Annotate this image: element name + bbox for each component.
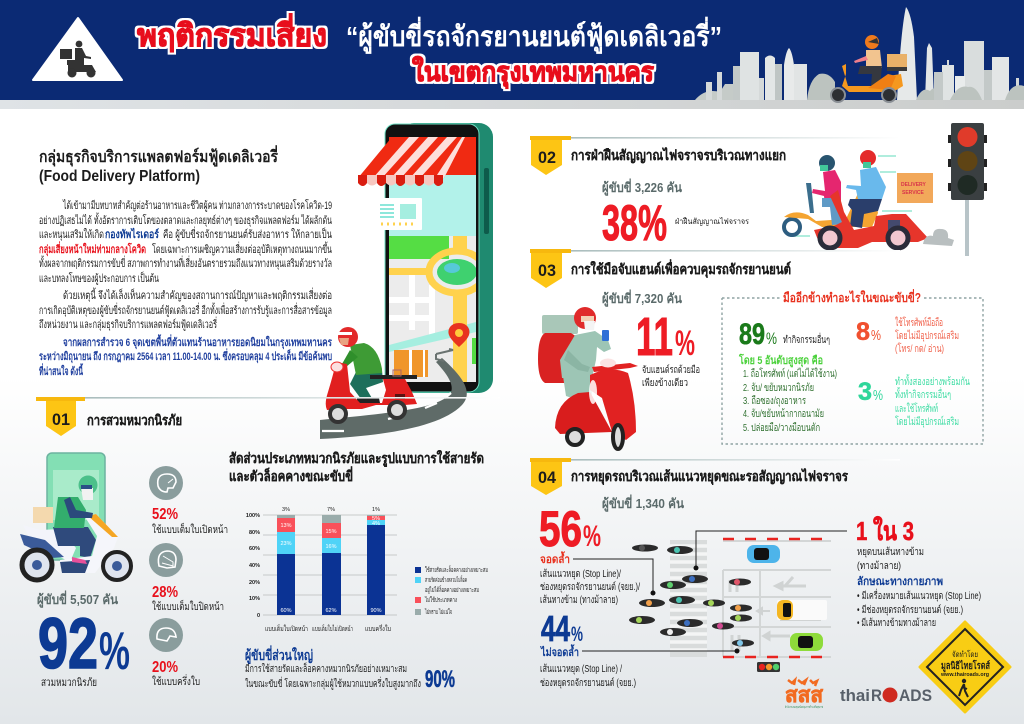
label 20 percent: ใช้แบบครึ่งใบ	[152, 674, 200, 688]
section divider and badge 01: 01	[52, 410, 70, 429]
chart title: สัดส่วนประเภทหมวกนิรภัยและรูปแบบการใช้สายรัด	[229, 449, 484, 467]
paragraph three: survey note: จากผลการสำรวจ 6 จุดเขตพื้นที่ตัวแทนร้านอาหารยอดนิยมในกรุงเทพมหานคร	[63, 334, 332, 350]
statistic 8 percent: 8	[856, 318, 870, 346]
paragraph one: อย่างปฏิเสธไม่ได้ ทั้งอัตราการเติบโตของตลาดและกลยุทธ์ต่างๆ ของธุรกิจแพลตฟอร์ม ได้ผลักดัน	[39, 212, 332, 227]
statistic 28 percent: 28%	[152, 584, 178, 601]
section divider and badge 03: 03	[538, 261, 556, 280]
paragraph one: และหนุนเสริมให้เกิด	[39, 228, 104, 241]
stacked bar chart: 20%	[249, 580, 260, 586]
bar: half helmet	[367, 515, 385, 615]
winding road	[320, 349, 467, 439]
logo: thaiRoads: ADS	[899, 686, 932, 705]
icon: open face full helmet	[149, 466, 183, 500]
paragraph one	[39, 198, 332, 285]
label doing both: และใช้โทรศัพท์	[895, 402, 938, 415]
statistic 11 percent: 11	[636, 307, 673, 367]
illustration: city skyline	[695, 7, 1024, 100]
section 03: one-handed riding	[530, 249, 983, 449]
stacked bar chart: 62%	[325, 608, 337, 614]
rider count 7,320: ผู้ขับขี่ 7,320 คัน	[602, 289, 682, 307]
statistic 11 percent: %	[675, 324, 695, 363]
top five list: 3. ถือซอง/ถุงอาหาร	[743, 394, 806, 407]
paragraph one: และบทลงโทษของผู้ประกอบการ เป็นต้น	[39, 271, 159, 285]
statistic 56 percent: 56	[539, 501, 582, 557]
logo: thaiRoads: thai	[840, 686, 870, 705]
statistic 56 percent: %	[583, 520, 601, 553]
rider count 5,507: ผู้ขับขี่ 5,507 คัน	[37, 590, 118, 608]
illustration: rider holding phone on red scooter	[538, 307, 638, 449]
illustration: two scooters speeding	[784, 150, 954, 248]
label stopping on crosswalk: (ทางม้าลาย)	[857, 560, 901, 572]
sign: Thai Roads Foundation: จัดทำโดย	[952, 649, 978, 659]
label not over the line: ไม่จอดล้ำ	[539, 644, 579, 659]
leader line to over the line label	[573, 559, 656, 596]
description over the line: เส้นทางข้าม (ทางม้าลาย)	[540, 594, 618, 606]
top five list: 1. ถือโทรศัพท์ (แต่ไม่ได้ใช้งาน)	[743, 367, 837, 380]
sign: Thai Roads Foundation: www.thairoads.org	[940, 672, 989, 678]
label stopping on crosswalk	[857, 546, 924, 572]
logo: thaiRoads	[840, 686, 932, 705]
label one-handed: จับแฮนด์รถด้วยมือ	[642, 364, 700, 376]
rider count 3,226: ผู้ขับขี่ 3,226 คัน	[602, 178, 682, 196]
stacked bar chart: 4%	[372, 521, 380, 527]
label over the line: จอดล้ำ	[540, 551, 570, 566]
paragraph two: ด้วยเหตุนี้ จึงได้เล็งเห็นความสำคัญของสถานการณ์ปัญหาและพฤติกรรมเสี่ยงต่อ	[63, 287, 332, 302]
stacked bar chart: 40%	[249, 563, 260, 569]
statistic 20 percent: 20%	[152, 659, 178, 676]
top five list	[743, 367, 837, 434]
label one-handed: เพียงข้างเดียว	[642, 377, 688, 389]
label doing both	[895, 374, 970, 428]
icon: warning triangle with delivery rider	[33, 18, 122, 80]
chart title	[229, 449, 484, 484]
illustration: rider on red scooter	[326, 327, 417, 422]
chart title: และตัวล็อคคางขณะขับขี่	[229, 466, 353, 484]
motorcycles waiting	[629, 544, 754, 646]
description not over the line	[540, 663, 636, 689]
label doing both: โดยไม่มีอุปกรณ์เสริม	[895, 415, 959, 428]
icon: traffic signal	[757, 662, 780, 672]
bar: full face open visor	[277, 515, 295, 615]
stacked bar chart: 7%	[327, 507, 335, 513]
physical characteristics list: • มีเครื่องหมายเส้นแนวหยุด (Stop Line)	[857, 588, 981, 602]
paragraph one: ได้เข้ามามีบทบาทสำคัญต่อร้านอาหารและชีวิตผู้คน ท่ามกลางการระบาดของโรคโควิด-19	[62, 198, 332, 212]
statistic 89 percent: %	[766, 329, 777, 348]
label one-handed	[642, 364, 700, 389]
panel heading: มืออีกข้างทำอะไรในขณะขับขี่?	[783, 289, 921, 305]
statistic 92 percent: %	[99, 622, 130, 681]
stacked bar chart: 10%	[249, 596, 260, 602]
illustration: two scooters speeding: DELIVERY	[901, 182, 926, 188]
stacked bar chart: 1%	[372, 507, 380, 513]
section divider and badge 02	[530, 136, 900, 175]
paragraph two: ถึงหน่วยงาน และกลุ่มธุรกิจบริการแพลตฟอร์มฟู้ดเดลิเวอรี่	[39, 316, 217, 331]
stacked bar chart: 60%	[280, 608, 292, 614]
callout: most riders: ผู้ขับขี่ส่วนใหญ่	[245, 645, 313, 664]
statistic 92 percent: 92	[38, 605, 98, 684]
illustration: two scooters speeding: SERVICE	[902, 190, 925, 196]
description over the line: ช่องหยุดรถจักรยานยนต์ (จยย.)/	[540, 581, 640, 593]
stacked bar chart: 80%	[249, 530, 260, 536]
statistic 3 percent: 3	[858, 378, 872, 406]
statistic 89 percent: 89	[739, 318, 765, 351]
logo: ThaiHealth: สำนักงานกองทุนสนับสนุนการสร้างเสริมสุขภาพ	[785, 705, 823, 710]
section divider and badge 03	[530, 249, 900, 288]
bar: full face closed visor	[322, 515, 341, 615]
paragraph three: survey note	[39, 334, 332, 378]
statistic 38 percent: 38%	[602, 195, 667, 251]
stacked bar chart: แบบเต็มใบไม่เปิดหน้า	[312, 624, 353, 633]
chart panel: helmet types and chin strap use	[229, 449, 488, 693]
statistic 3 percent: %	[873, 387, 883, 404]
paragraph three: survey note: ระหว่างมิถุนายน ถึง กรกฎาคม 2564 เวลา 11.00-14.00 น. ซึ่งครอบคลุม 4 ประเด็น มีข้อค้นพบ	[39, 348, 332, 364]
section 04: stopping at stop line	[530, 458, 1010, 712]
stacked bar chart: 0	[257, 613, 260, 619]
label phone use without accessory: ใช้โทรศัพท์มือถือ	[895, 316, 943, 329]
heading physical characteristics: ลักษณะทางกายภาพ	[857, 575, 943, 588]
chart legend: ไม่ใช้ประเภทคาง	[424, 596, 457, 604]
label doing both: ทำทั้งสองอย่างพร้อมกัน	[895, 374, 970, 388]
heading: food delivery platform: (Food Delivery Platform)	[39, 168, 200, 185]
heading 04: การหยุดรถบริเวณเส้นแนวหยุดขณะรอสัญญาณไฟจราจร	[571, 467, 848, 485]
logo: thaiRoads: R	[871, 686, 882, 705]
header banner	[0, 0, 1024, 109]
paragraph one: คือ ผู้ขับขี่รถจักรยานยนต์รับส่งอาหาร ให้กลายเป็น	[163, 226, 332, 241]
statistic 3 percent	[858, 378, 883, 406]
leader line to not over the line label	[582, 648, 740, 654]
physical characteristics list: • มีเส้นทางข้ามทางม้าลาย	[857, 617, 936, 629]
paragraph three: survey note: ที่น่าสนใจ ดังนี้	[39, 363, 83, 378]
section divider and badge 04: 04	[538, 468, 557, 487]
top five list heading: โดย 5 อันดับสูงสุด คือ	[738, 353, 823, 368]
diagram: intersection with motorcycles	[629, 539, 831, 672]
stacked bar chart: 60%	[249, 546, 260, 552]
statistic 44 percent: %	[571, 623, 583, 646]
section divider and badge 02: 02	[538, 148, 556, 167]
stacked bar chart: 13%	[280, 523, 292, 529]
paragraph one: กองทัพไรเดอร์	[105, 227, 159, 241]
stacked bar chart: 3%	[282, 507, 290, 513]
statistic 1 in 3: 1 ใน 3	[856, 516, 914, 546]
section divider and badge 01	[36, 397, 500, 436]
illustration: phone with storefront, map and rider	[320, 123, 493, 439]
sign: Thai Roads Foundation	[920, 622, 1010, 712]
chart legend	[415, 565, 488, 616]
chart legend: อยู่ไม่ได้ล็อคคางอย่างเหมาะสม	[425, 585, 479, 594]
car: blue	[747, 545, 780, 563]
description not over the line: เส้นแนวหยุด (Stop Line) /	[540, 663, 622, 675]
icon: closed full face helmet	[149, 543, 183, 577]
statistic 8 percent	[856, 318, 881, 346]
description not over the line: ช่องหยุดรถจักรยานยนต์ (จยย.)	[540, 677, 636, 689]
heading 02: การฝ่าฝืนสัญญาณไฟจราจรบริเวณทางแยก	[571, 146, 786, 164]
title: in Bangkok: ในเขตกรุงเทพมหานคร	[412, 56, 654, 89]
title: food delivery riders: “ผู้ขับขี่รถจักรยานยนต์ฟู้ดเดลิเวอรี่”	[346, 16, 722, 54]
chart legend: ใช้สายรัดและล็อคคางอย่างเหมาะสม	[425, 565, 488, 574]
stacked bar chart: 5%	[372, 516, 380, 522]
label red light running: ฝ่าฝืนสัญญาณไฟจราจร	[675, 217, 750, 226]
top five list: 2. จับ/ ขยับหมวกนิรภัย	[743, 382, 814, 394]
panel: what the other hand is doing	[722, 289, 983, 444]
icon: location pin	[448, 323, 470, 347]
paragraph one: ทั้งผลจากพฤติกรรมการขับขี่ สภาพการทำงานที่เสี่ยงอันตรายรวมถึงแนวทางหนุนเสริมด้วยรางวัล	[39, 255, 332, 270]
sign: Thai Roads Foundation: มูลนิธิไทยโรดส์	[941, 659, 991, 673]
callout text: ในขณะขับขี่ โดยเฉพาะกลุ่มผู้ใช้หมวกแบบครึ่งใบสูงมากถึง	[245, 676, 421, 690]
heading 03: การใช้มือจับแฮนด์เพื่อควบคุมรถจักรยานยนต์	[571, 259, 791, 278]
label 52 percent: ใช้แบบเต็มใบเปิดหน้า	[152, 522, 228, 536]
title: risk behaviour: พฤติกรรมเสี่ยง	[137, 13, 327, 53]
rider count 1,340: ผู้ขับขี่ 1,340 คัน	[602, 494, 684, 512]
stacked bar chart: แบบเต็มใบเปิดหน้า	[265, 624, 308, 633]
paragraph one: โดยเฉพาะการเผชิญความเสี่ยงต่ออุบัติเหตุทางถนนมากขึ้น	[152, 241, 332, 256]
truck: yellow cab	[777, 600, 827, 620]
statistic 8 percent: %	[871, 327, 881, 344]
stacked bar chart	[246, 507, 397, 633]
description over the line: เส้นแนวหยุด (Stop Line)/	[540, 568, 621, 580]
stacked bar chart: 15%	[325, 529, 337, 535]
store info card	[377, 198, 422, 230]
chart legend: สายรัดค่อนข้างหลวมไม่ล็อค	[425, 575, 467, 584]
leader line to 1 in 3 label	[694, 531, 847, 570]
statistic 90 percent: 90%	[425, 666, 455, 693]
stacked bar chart: 90%	[370, 608, 382, 614]
label doing both: ทั้งทำกิจกรรมอื่นๆ	[895, 387, 951, 401]
intro text block	[39, 145, 332, 378]
heading 01: การสวมหมวกนิรภัย	[87, 412, 182, 428]
label phone use without accessory: โดยไม่มีอุปกรณ์เสริม	[895, 329, 959, 342]
callout text: มีการใช้สายรัดและล็อคคางหมวกนิรภัยอย่างเหมาะสม	[245, 661, 407, 675]
icon: half helmet	[149, 618, 183, 652]
section divider and badge 04	[530, 458, 900, 495]
top five list: 4. จับ/ขยับหน้ากากอนามัย	[743, 408, 824, 420]
store awning	[358, 137, 465, 186]
illustration: rider on motorcycle in front of phone	[20, 453, 131, 580]
paragraph two	[39, 287, 332, 331]
logo: ThaiHealth: สสส	[785, 684, 823, 707]
label 28 percent: ใช้แบบเต็มใบปิดหน้า	[152, 599, 224, 613]
label wearing helmet: สวมหมวกนิรภัย	[41, 677, 97, 689]
paragraph one: กลุ่มเสี่ยงหน้าใหม่ท่ามกลางโควิด	[39, 241, 146, 257]
stacked bar chart: 23%	[280, 541, 292, 547]
chart legend: ไม่ทราบ ไม่แน่ใจ	[424, 608, 452, 616]
description over the line	[540, 568, 640, 606]
callout text	[245, 661, 421, 690]
stacked bar chart: 100%	[246, 513, 260, 519]
label phone use without accessory	[895, 316, 959, 355]
stacked bar chart: 16%	[325, 544, 337, 550]
statistic 44 percent: 44	[541, 608, 570, 649]
car: green	[790, 633, 823, 651]
label phone use without accessory: (โทร/ กด/ อ่าน)	[895, 342, 944, 355]
label stopping on crosswalk: หยุดบนเส้นทางข้าม	[857, 546, 924, 558]
section 01: helmet use	[20, 397, 500, 689]
physical characteristics list: • มีช่องหยุดรถจักรยานยนต์ (จยย.)	[857, 604, 963, 616]
paragraph two: การเกิดอุบัติเหตุของผู้ขับขี่รถจักรยานยนต์ฟู้ดเดลิเวอรี่ อีกทั้งเพื่อสร้างการรับรู้และการสื่อสารข้อมูล	[39, 302, 332, 317]
section 02: running red lights	[530, 123, 987, 256]
physical characteristics list	[857, 588, 981, 629]
illustration: orange delivery scooter	[831, 35, 907, 102]
stacked bar chart: แบบครึ่งใบ	[365, 624, 391, 633]
icon: traffic light	[948, 123, 987, 256]
top five list: 5. ปล่อยมือ/วางมือบนตัก	[743, 421, 820, 434]
heading: platform businesses: กลุ่มธุรกิจบริการแพลตฟอร์มฟู้ดเดลิเวอรี่	[39, 145, 278, 168]
label other activities: ทำกิจกรรมอื่นๆ	[783, 332, 830, 346]
statistic 52 percent: 52%	[152, 506, 178, 523]
